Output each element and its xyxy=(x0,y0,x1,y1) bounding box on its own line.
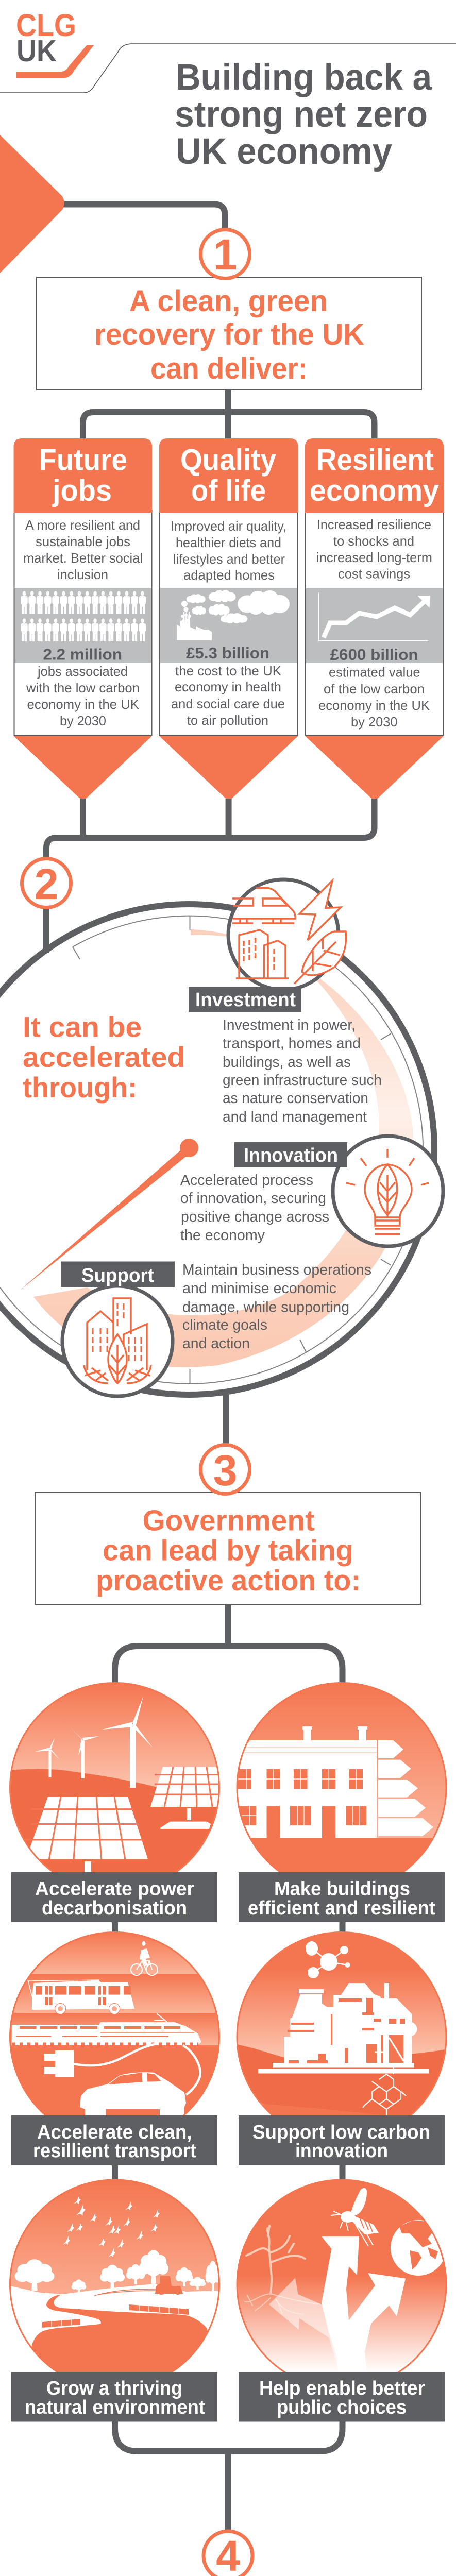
step number 3 xyxy=(201,1445,249,1495)
panel: resilient economy: economy in the UK xyxy=(318,698,430,713)
bee xyxy=(331,2188,379,2246)
heading: accelerated xyxy=(23,1041,185,1073)
illustration: bike bus train car xyxy=(11,1933,218,2115)
title: UK economy xyxy=(176,131,392,172)
panel: future jobs: 2.2 million xyxy=(43,645,122,664)
panel: quality of life: to air pollution xyxy=(187,713,268,728)
investment circle and icons xyxy=(228,879,346,990)
box: step 1 heading: recovery for the UK xyxy=(94,318,364,351)
connector: start to step 1 xyxy=(57,204,225,229)
step number 2 xyxy=(22,858,71,908)
box: step 1 heading: A clean, green xyxy=(129,284,328,318)
panel: quality of life: adapted homes xyxy=(183,567,275,583)
panel: future jobs: economy in the UK xyxy=(27,697,140,712)
bicycle xyxy=(131,1961,158,1975)
bus xyxy=(32,1980,134,2010)
panel: quality of life: lifestyles and better xyxy=(173,551,285,567)
investment text xyxy=(223,1017,382,1125)
innovation text: Accelerated process xyxy=(180,1172,313,1189)
panel: quality of life: Quality xyxy=(180,444,276,477)
panel: quality of life: Improved air quality, xyxy=(171,518,286,534)
panel: accelerate power decarbonisation: decarbonisation xyxy=(42,1897,187,1919)
logo: CLG UK: UK xyxy=(16,34,57,68)
support text xyxy=(182,1262,371,1352)
investment text: and land management xyxy=(223,1109,367,1125)
connector: cards to step 2 xyxy=(46,799,374,953)
title: Building back a xyxy=(176,57,432,98)
panel: resilient economy: Resilient xyxy=(316,444,434,477)
panel: future jobs: with the low carbon xyxy=(26,680,140,696)
panel: resilient economy xyxy=(305,438,444,800)
panel: grow a thriving natural environment: Grow a thriving xyxy=(46,2378,182,2399)
innovation text: of innovation, securing xyxy=(180,1190,326,1207)
panel: support low carbon innovation: innovation xyxy=(295,2140,388,2162)
innovation text xyxy=(180,1172,329,1244)
illustration: wind and solar xyxy=(11,1684,218,1872)
label: investment: Investment xyxy=(195,989,296,1011)
logo: CLG UK xyxy=(16,8,94,78)
support text: climate goals xyxy=(182,1317,267,1333)
panel: accelerate clean resilient transport: Accelerate clean, xyxy=(37,2122,192,2143)
connectors: government actions xyxy=(115,1604,342,2576)
investment text: transport, homes and xyxy=(223,1036,361,1052)
panel: accelerate power decarbonisation: Accelerate power xyxy=(35,1878,194,1900)
panel: grow a thriving natural environment xyxy=(8,2179,227,2421)
gauge needle xyxy=(20,1139,198,1291)
panel: accelerate clean resilient transport xyxy=(8,1931,222,2165)
panel: future jobs: A more resilient and xyxy=(25,517,140,533)
panel: future jobs: inclusion xyxy=(57,567,108,582)
step number 1: 1 xyxy=(213,230,237,279)
innovation circle and bulb icon xyxy=(333,1136,443,1246)
logo: CLG UK: CLG xyxy=(16,8,76,43)
plug and cable xyxy=(44,2050,74,2077)
panel: accelerated through ring xyxy=(0,879,443,1396)
panel: quality of life: healthier diets and xyxy=(176,535,281,550)
panel: make buildings efficient and resilient xyxy=(232,1683,448,1922)
panel: quality of life: £5.3 billion xyxy=(186,644,269,662)
tractor xyxy=(155,2276,183,2295)
investment text: as nature conservation xyxy=(223,1090,368,1107)
panel: grow a thriving natural environment: natural environment xyxy=(25,2397,205,2418)
crescent band xyxy=(33,929,413,1367)
title xyxy=(175,57,432,172)
panel: support low carbon innovation xyxy=(232,1932,453,2165)
thin scale ring xyxy=(0,916,423,1384)
panel: resilient economy: estimated value xyxy=(329,665,420,680)
panel: support low carbon innovation: Support low carbon xyxy=(252,2122,430,2143)
icon: people xyxy=(21,591,146,641)
support text: and minimise economic xyxy=(182,1280,336,1297)
support circle and city icon xyxy=(62,1286,173,1396)
box: step 3 heading: can lead by taking xyxy=(103,1534,353,1567)
panel: help enable better public choices: Help enable better xyxy=(259,2378,425,2399)
panel: make buildings efficient and resilient: Make buildings xyxy=(274,1878,410,1900)
panel: resilient economy: to shocks and xyxy=(333,533,414,549)
illustration: countryside xyxy=(11,2180,218,2372)
panel: make buildings efficient and resilient: efficient and resilient xyxy=(248,1897,435,1919)
investment text: Investment in power, xyxy=(223,1017,356,1033)
panel: resilient economy: £600 billion xyxy=(330,646,418,664)
header frame line xyxy=(0,44,456,93)
car xyxy=(80,2072,186,2115)
step number 4 xyxy=(204,2531,252,2576)
panel: resilient economy: cost savings xyxy=(338,566,410,581)
panel: future jobs: market. Better social xyxy=(23,550,143,566)
panel: future jobs: by 2030 xyxy=(60,713,106,728)
panel: resilient economy: increased long-term xyxy=(316,550,432,565)
panel: quality of life: of life xyxy=(191,474,266,507)
illustration: fork, bee, globe, dead tree xyxy=(238,2180,445,2368)
label: innovation: Innovation xyxy=(244,1145,338,1166)
support text: and action xyxy=(182,1335,250,1352)
panel: quality of life: the cost to the UK xyxy=(175,663,282,679)
panel: help enable better public choices xyxy=(237,2179,447,2421)
innovation text: the economy xyxy=(180,1227,265,1244)
box: step 3 heading xyxy=(35,1493,420,1604)
thick ring xyxy=(0,904,434,1395)
support text: Maintain business operations xyxy=(182,1262,371,1278)
box: step 1 heading: can deliver: xyxy=(150,352,308,385)
panel: resilient economy: of the low carbon xyxy=(324,681,425,697)
innovation text: positive change across xyxy=(181,1209,329,1225)
panel: resilient economy: Increased resilience xyxy=(317,517,431,532)
illustration: factory and molecules xyxy=(238,1933,445,2115)
icon: rising chart xyxy=(318,592,430,641)
box: step 3 heading: proactive action to: xyxy=(96,1564,361,1597)
panel: quality of life: and social care due xyxy=(171,696,285,711)
investment text: buildings, as well as xyxy=(223,1054,351,1071)
label: support: Support xyxy=(81,1265,154,1286)
panel: future jobs xyxy=(13,438,152,800)
dead tree xyxy=(245,2226,319,2314)
illustration: house with energy ratings xyxy=(238,1684,445,1872)
step number 2: 2 xyxy=(35,860,58,908)
heading xyxy=(23,1011,185,1104)
panel: future jobs: jobs xyxy=(52,474,112,507)
panel: future jobs: jobs associated xyxy=(37,664,128,679)
panel: future jobs: sustainable jobs xyxy=(36,534,130,549)
panel: resilient economy: economy xyxy=(310,474,439,507)
connector: ring to step 3 xyxy=(223,1391,229,1445)
heading: through: xyxy=(23,1071,137,1104)
box: step 1 heading xyxy=(37,277,421,389)
label: support xyxy=(61,1261,175,1287)
icon: factory and clouds xyxy=(177,590,290,640)
start arrow tab xyxy=(0,135,64,273)
heading: It can be xyxy=(23,1011,142,1043)
panel: quality of life: economy in health xyxy=(175,679,281,694)
panel: accelerate power decarbonisation xyxy=(0,1683,227,1922)
train xyxy=(12,2022,201,2045)
panel: quality of life xyxy=(159,438,298,800)
panel: future jobs: Future xyxy=(39,444,127,477)
panel: help enable better public choices: public choices xyxy=(277,2397,407,2418)
box: step 3 heading: Government xyxy=(142,1504,315,1537)
step number 1 xyxy=(201,230,249,279)
connector: step 1 to cards xyxy=(83,389,374,443)
step number 3: 3 xyxy=(213,1446,237,1495)
panel: resilient economy: by 2030 xyxy=(351,714,398,730)
title: strong net zero xyxy=(175,94,428,135)
panel: accelerate clean resilient transport: resillient transport xyxy=(33,2140,196,2162)
globe xyxy=(391,2220,446,2276)
support text: damage, while supporting xyxy=(182,1299,349,1316)
investment text: green infrastructure such xyxy=(223,1072,382,1089)
